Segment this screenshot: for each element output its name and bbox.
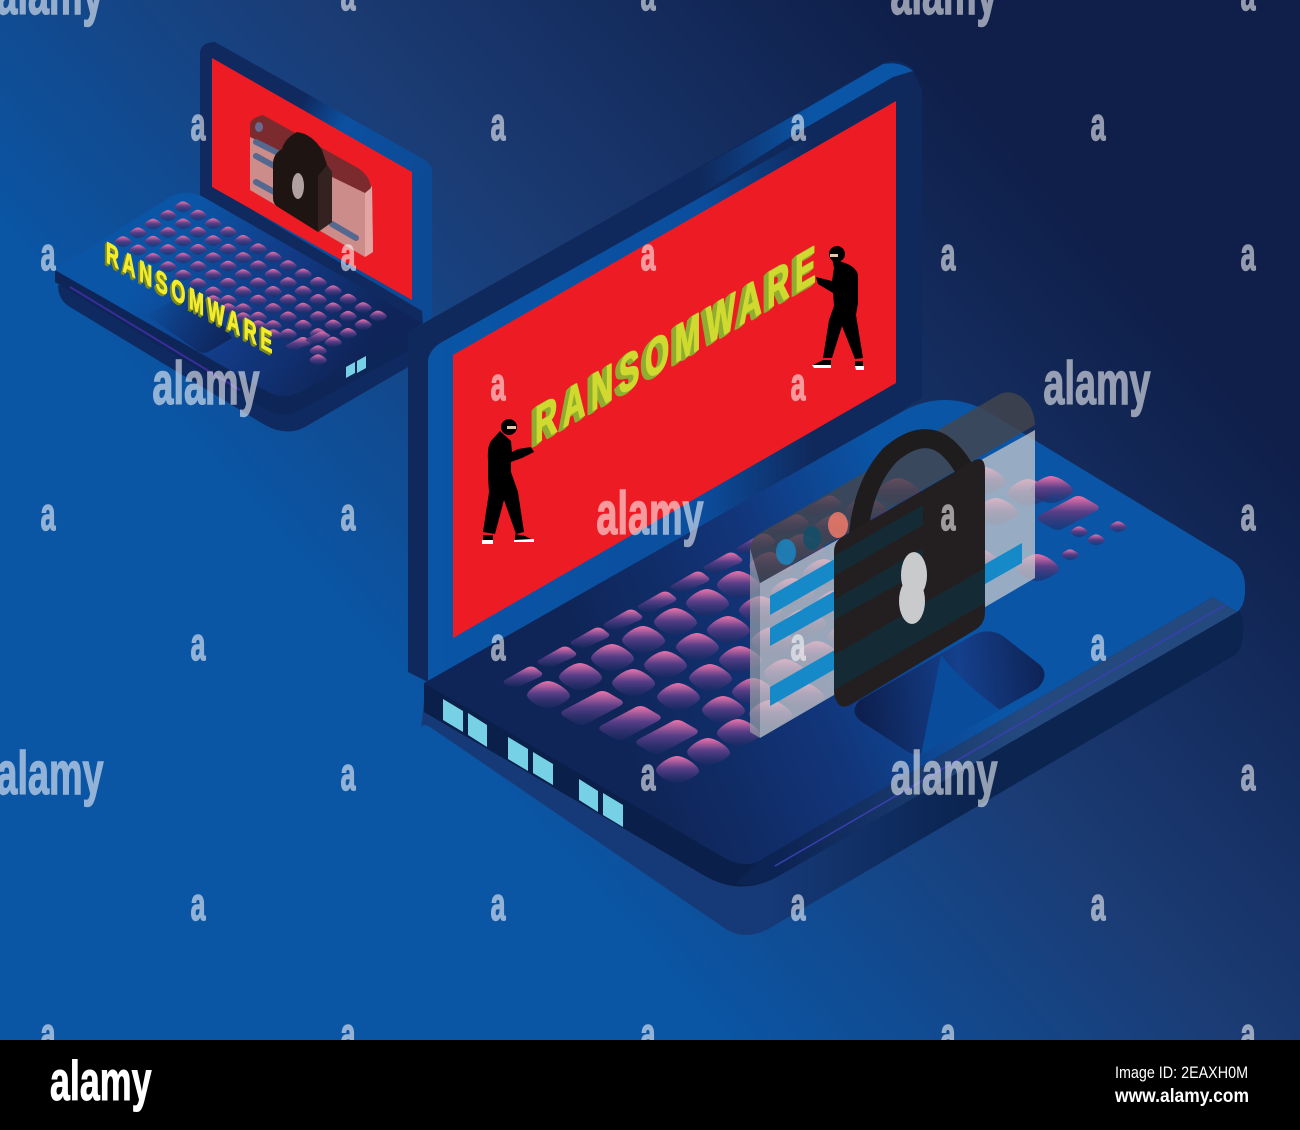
eye band: [830, 254, 838, 257]
small keyboard keys: [115, 201, 387, 365]
watermarks: a: [491, 358, 506, 410]
main laptop: [408, 61, 1245, 935]
watermarks: a: [491, 618, 506, 670]
shoes: [483, 534, 533, 540]
window side: [750, 548, 760, 738]
main screen back: [408, 61, 922, 682]
watermarks: a: [191, 878, 206, 930]
main trackpad: [854, 631, 1045, 754]
small laptop shadow: [58, 285, 408, 432]
small laptop purple edge line: [70, 287, 240, 390]
small trackpad: [147, 287, 232, 353]
keyhole: [292, 173, 304, 199]
head: [829, 246, 845, 262]
body: [483, 431, 534, 534]
watermarks: a: [1241, 1008, 1256, 1060]
body: [816, 258, 863, 359]
window face: [760, 430, 1035, 738]
deck right band: [735, 597, 1237, 885]
small laptop red screen: [212, 58, 412, 300]
watermarks: a: [641, 1008, 656, 1060]
watermarks: alamy: [1043, 350, 1151, 417]
website: www.alamy.com: [1114, 1086, 1249, 1107]
small laptop: [55, 42, 432, 432]
translucent browser window: [750, 392, 1035, 738]
watermarks: a: [41, 1008, 56, 1060]
trackpad light wedge: [921, 655, 1000, 755]
watermarks: a: [1091, 98, 1106, 150]
watermarks: a: [41, 228, 56, 280]
watermarks: a: [791, 98, 806, 150]
shoe soles: [482, 539, 534, 544]
window face: [250, 130, 373, 257]
footer bar: [0, 1040, 1300, 1130]
watermarks: a: [1241, 748, 1256, 800]
deck purple line: [775, 605, 1225, 866]
watermarks: a: [191, 618, 206, 670]
small laptop deck: [55, 193, 423, 396]
watermarks: alamy: [890, 740, 998, 807]
watermarks: a: [1091, 618, 1106, 670]
main red screen: [453, 101, 896, 638]
small padlock: [273, 132, 332, 232]
hacker left: [482, 419, 534, 544]
small laptop status lights: [346, 356, 366, 378]
shackle: [858, 439, 967, 540]
watermarks: a: [941, 1008, 956, 1060]
cyan function keys: [443, 699, 623, 827]
keyhole: [899, 552, 927, 624]
main laptop shadow: [421, 605, 1243, 935]
watermarks: alamy: [596, 480, 704, 547]
window title bar: [250, 115, 371, 193]
watermarks: a: [641, 228, 656, 280]
shoe soles: [812, 365, 864, 370]
lock body: [834, 459, 985, 707]
small RANSOMWARE 3D text: RANSOMWARE: [106, 236, 276, 362]
watermarks: a: [41, 488, 56, 540]
window content bars: [770, 543, 1022, 706]
hacker right: [812, 246, 864, 370]
watermarks: a: [641, 748, 656, 800]
watermarks: a: [341, 1008, 356, 1060]
head: [501, 419, 517, 435]
window button: [255, 122, 263, 132]
watermarks: a: [1241, 228, 1256, 280]
watermarks: a: [1091, 878, 1106, 930]
watermarks: a: [341, 748, 356, 800]
main screen blue frame: [428, 88, 905, 682]
watermarks: a: [341, 488, 356, 540]
eye band: [507, 426, 516, 429]
small laptop screen left edge: [200, 44, 423, 323]
main RANSOMWARE 3D text: RANSOMWARE: [535, 232, 821, 456]
main padlock: [834, 439, 985, 707]
shoes: [813, 360, 863, 366]
watermarks: alamy: [152, 350, 260, 417]
watermarks: a: [941, 488, 956, 540]
image id: Image ID: 2EAXH0M: [1115, 1063, 1248, 1082]
small browser window on screen: [250, 115, 373, 257]
watermarks: a: [941, 228, 956, 280]
window title bar: [750, 392, 1035, 583]
main laptop deck: [424, 400, 1245, 864]
watermarks: a: [341, 228, 356, 280]
window side: [365, 186, 373, 257]
main screen top blue strip: [607, 63, 913, 220]
main keyboard keys: [504, 467, 1127, 783]
small laptop screen frame: [200, 42, 432, 323]
main laptop base side: [424, 590, 1237, 887]
window lines: [256, 142, 356, 238]
watermarks: a: [191, 98, 206, 150]
watermarks: a: [491, 878, 506, 930]
window buttons: [776, 512, 848, 565]
watermarks: a: [791, 878, 806, 930]
watermarks: a: [491, 98, 506, 150]
lock reflected stripes: [834, 505, 985, 690]
watermarks: a: [791, 358, 806, 410]
footer logo: alamy: [50, 1049, 152, 1112]
watermarks: a: [791, 618, 806, 670]
small laptop base side: [55, 270, 410, 415]
watermarks: a: [1241, 488, 1256, 540]
